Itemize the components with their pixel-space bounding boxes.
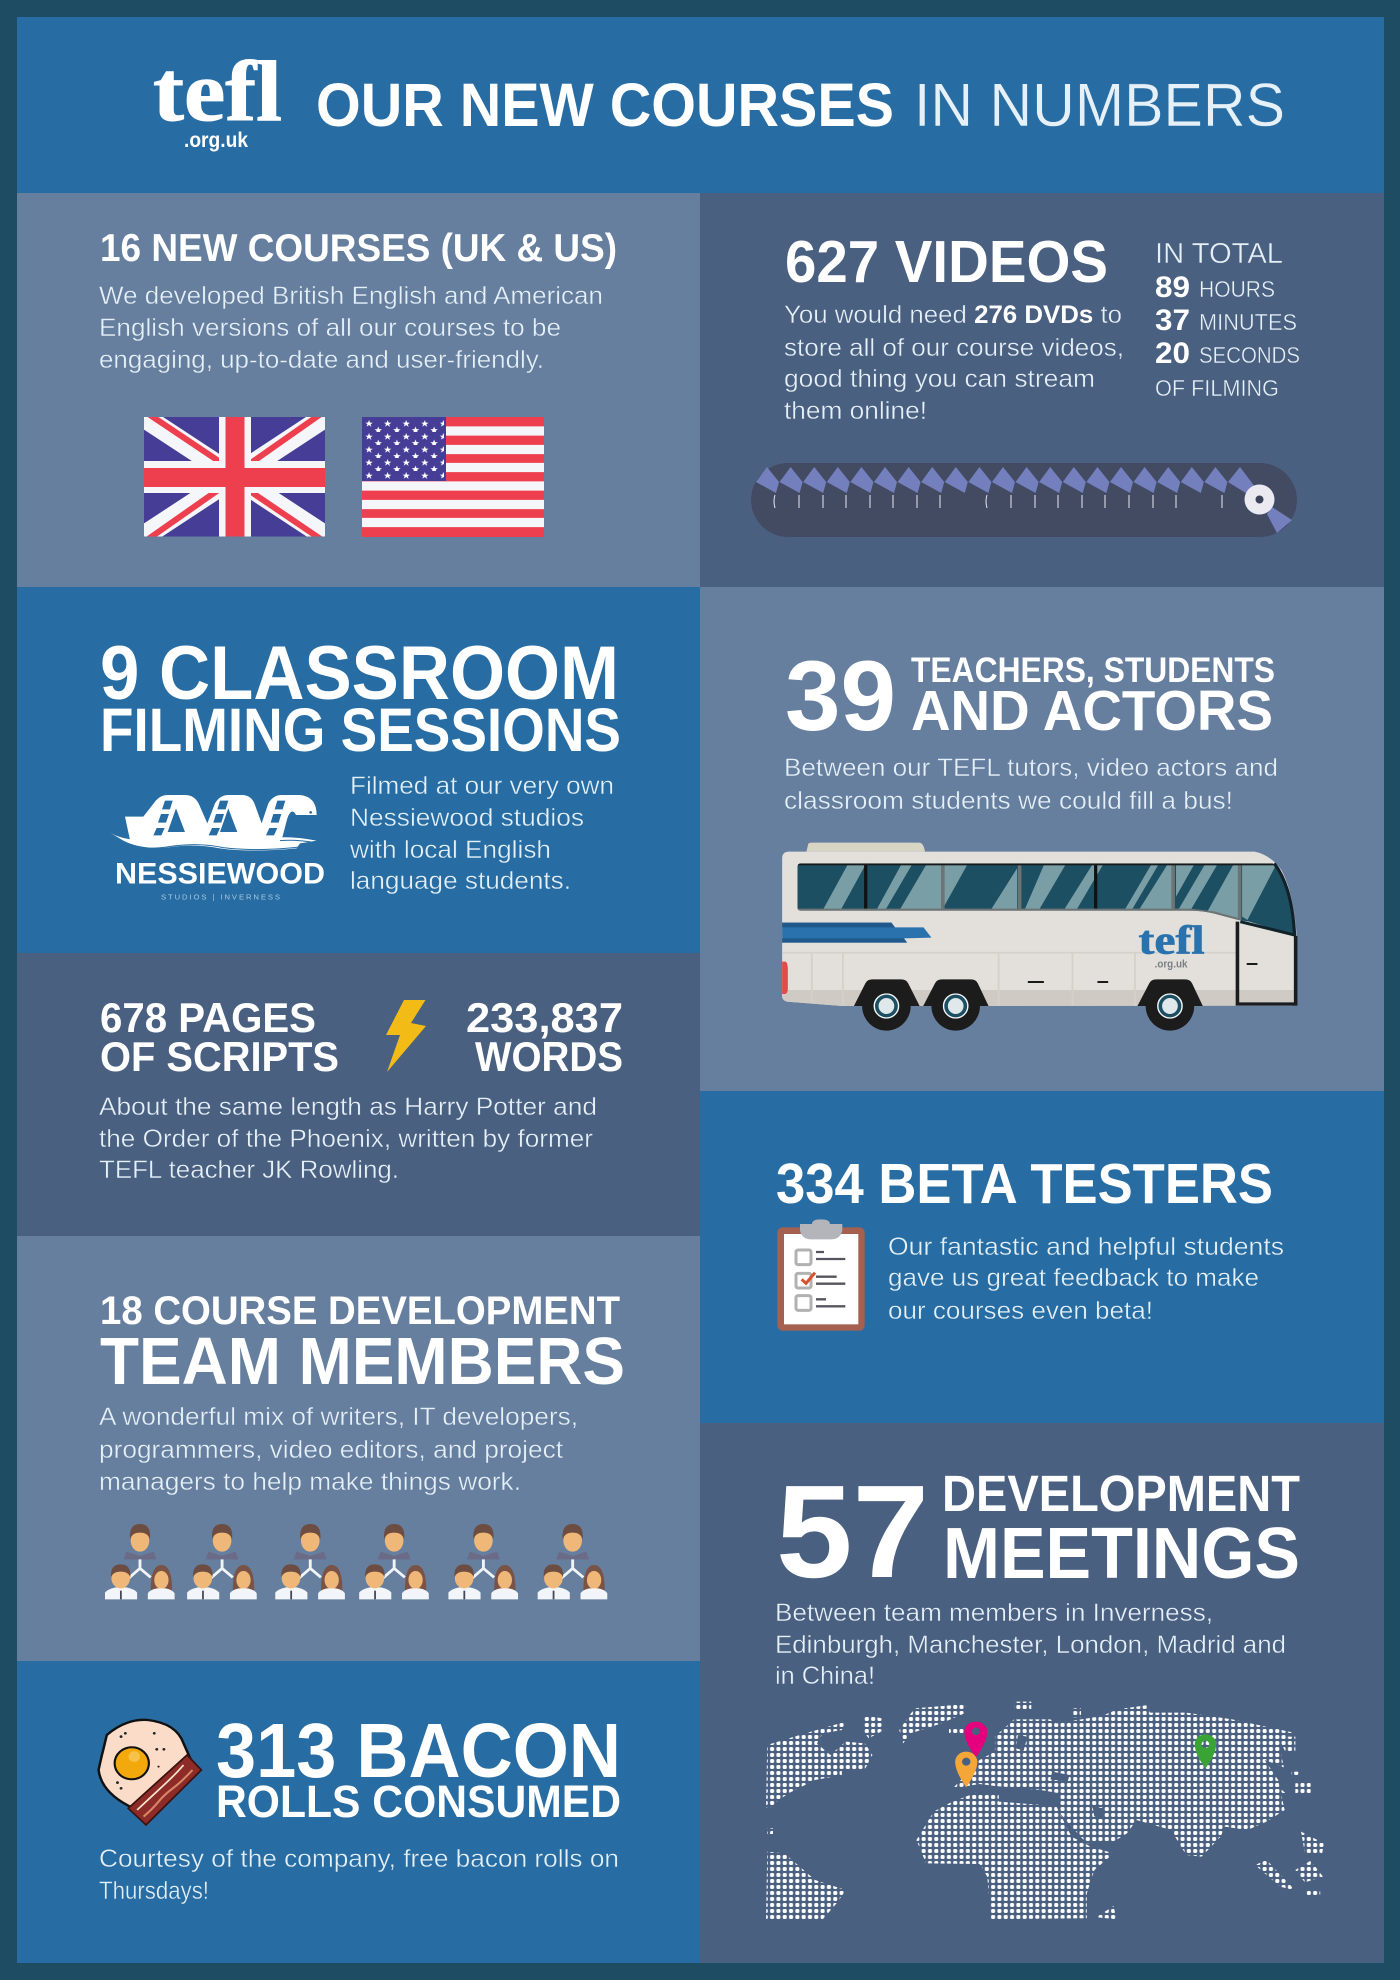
text block: Nessiewood studios: with local English <box>349 836 551 864</box>
text block: student feedback: Our fantastic and helpful students <box>888 1233 1284 1261</box>
heading: 16 new courses: 16 NEW COURSES (UK & US) <box>100 227 617 270</box>
text block: 276 DVDs: good thing you can stream <box>784 365 1095 393</box>
panel: 627 videos <box>700 193 1384 587</box>
icon: UK flag <box>144 411 325 542</box>
text block: meeting locations: Between team members in Inverness, <box>775 1599 1213 1627</box>
heading: 39 teachers, students and actors: 39 <box>785 640 896 751</box>
text block: free bacon rolls: Courtesy of the company, free bacon rolls on <box>99 1845 619 1873</box>
icon: clipboard checklist <box>777 1219 865 1331</box>
heading: 334 beta testers: 334 BETA TESTERS <box>776 1152 1273 1216</box>
text block: Nessiewood studios <box>349 772 614 895</box>
text block: 276 DVDs: store all of our course videos, <box>784 334 1124 362</box>
text block: total filming time: HOURS <box>1199 276 1275 302</box>
text block: fill a bus: classroom students we could fill a bus! <box>784 787 1233 815</box>
text block: total filming time: MINUTES <box>1199 309 1297 335</box>
heading: 9 classroom filming sessions <box>100 631 621 764</box>
logo: Nessiewood <box>110 795 325 901</box>
text block: Nessiewood studios: Nessiewood studios <box>350 804 584 832</box>
heading: 233,837 words: WORDS <box>475 1033 623 1080</box>
heading: 233,837 words: 233,837 <box>466 994 623 1041</box>
heading: 627 videos: 627 VIDEOS <box>785 229 1108 295</box>
text block: Nessiewood studios: language students. <box>350 867 571 895</box>
icon: pink pin <box>964 1722 987 1757</box>
icon: green pin <box>1195 1734 1216 1768</box>
text block: 276 DVDs: You would need 276 DVDs to <box>784 301 1122 329</box>
logo: Nessiewood: STUDIOS | INVERNESS <box>161 892 280 901</box>
logo: Nessiewood: NESSIEWOOD <box>115 857 325 890</box>
icon: tefl coach bus: tefl <box>1139 918 1205 963</box>
heading: 18 course development team members <box>100 1289 625 1399</box>
text block: Harry Potter comparison: TEFL teacher JK Rowling. <box>99 1156 399 1184</box>
heading: 39 teachers, students and actors: TEACHERS, STUDENTS <box>911 651 1275 690</box>
text block: British and American versions: engaging, up-to-date and user-friendly. <box>99 346 544 374</box>
text block: total filming time: OF FILMING <box>1155 375 1279 401</box>
heading: 313 bacon rolls consumed <box>216 1708 621 1827</box>
text block: total filming time: IN TOTAL <box>1155 238 1283 270</box>
text block: Harry Potter comparison: About the same length as Harry Potter and <box>99 1093 597 1121</box>
panel: 313 bacon rolls <box>17 1661 701 1963</box>
heading: 57 development meetings: 57 <box>776 1458 929 1605</box>
text block: total filming time: 37 <box>1155 304 1190 337</box>
text block: total filming time: SECONDS <box>1199 342 1300 368</box>
text block: British and American versions: English versions of all our courses to be <box>99 314 561 342</box>
panel: 39 teachers, students and actors <box>700 587 1384 1091</box>
panel: 16 new courses <box>17 193 701 587</box>
text block: team mix <box>99 1403 578 1496</box>
heading: 9 classroom filming sessions: FILMING SESSIONS <box>100 696 621 764</box>
heading: 57 development meetings: DEVELOPMENT <box>942 1465 1300 1522</box>
heading: 313 bacon rolls consumed: 313 BACON <box>216 1708 621 1794</box>
text block: student feedback: our courses even beta! <box>888 1297 1153 1325</box>
text block: fill a bus <box>784 754 1278 815</box>
panel: 678 pages of scripts <box>17 953 701 1236</box>
text block: British and American versions: We developed British English and American <box>99 282 603 310</box>
panel: 334 beta testers <box>700 1091 1384 1423</box>
heading: 18 course development team members: TEAM MEMBERS <box>100 1324 625 1399</box>
title: IN NUMBERS <box>914 71 1285 139</box>
text block: Harry Potter comparison <box>99 1093 597 1184</box>
logo: tefl.org.uk: tefl <box>153 43 282 139</box>
heading: 39 teachers, students and actors <box>785 640 1275 751</box>
text block: team mix: A wonderful mix of writers, IT developers, <box>99 1403 578 1431</box>
heading: 57 development meetings: MEETINGS <box>943 1514 1300 1594</box>
panel: 57 development meetings <box>700 1423 1384 1963</box>
heading: 18 course development team members: 18 COURSE DEVELOPMENT <box>100 1289 620 1333</box>
icon: tefl coach bus: .org.uk <box>1155 958 1188 970</box>
text block: Nessiewood studios: Filmed at our very own <box>350 772 614 800</box>
heading: 39 teachers, students and actors: AND ACTORS <box>911 679 1273 743</box>
text block: team mix: managers to help make things work. <box>99 1468 521 1496</box>
heading: 233,837 words <box>466 994 623 1080</box>
title: OUR NEW COURSES <box>316 71 894 139</box>
text block: Harry Potter comparison: the Order of the Phoenix, written by former <box>99 1125 593 1153</box>
text block: student feedback: gave us great feedback to make <box>888 1264 1259 1292</box>
text block: free bacon rolls <box>99 1845 619 1905</box>
logo: tefl.org.uk: .org.uk <box>184 129 248 152</box>
text block: British and American versions <box>99 282 603 374</box>
icon: row of DVDs <box>751 463 1297 537</box>
text block: meeting locations: Edinburgh, Manchester, London, Madrid and <box>775 1631 1286 1659</box>
heading: 313 bacon rolls consumed: ROLLS CONSUMED <box>216 1776 621 1827</box>
icon: tefl coach bus <box>782 843 1297 1031</box>
heading: 678 pages of scripts <box>100 994 339 1080</box>
heading: 57 development meetings <box>776 1458 1300 1605</box>
chart: dotted world map with pins <box>766 1702 1324 1919</box>
text block: meeting locations: in China! <box>775 1662 875 1690</box>
text block: total filming time: 20 <box>1155 337 1190 370</box>
icon: lightning bolt <box>386 1000 426 1072</box>
title <box>316 71 1285 139</box>
text block: total filming time <box>1155 238 1300 401</box>
header banner <box>17 17 1384 194</box>
heading: 678 pages of scripts: 678 PAGES <box>100 994 316 1041</box>
icon: orange pin <box>955 1752 977 1787</box>
text block: team mix: programmers, video editors, and project <box>99 1436 563 1464</box>
text block: total filming time: 89 <box>1155 271 1190 304</box>
text block: fill a bus: Between our TEFL tutors, video actors and <box>784 754 1278 782</box>
icon: egg and bacon <box>99 1720 201 1825</box>
text block: 276 DVDs <box>784 301 1124 425</box>
icon: six team groups <box>105 1524 607 1599</box>
text block: student feedback <box>888 1233 1284 1325</box>
text block: free bacon rolls: Thursdays! <box>99 1877 209 1905</box>
panel: 9 classroom filming sessions <box>17 587 701 954</box>
icon: US flag <box>362 417 544 537</box>
heading: 9 classroom filming sessions: 9 CLASSROOM <box>100 631 619 716</box>
text block: 276 DVDs: them online! <box>784 397 927 425</box>
text block: meeting locations <box>775 1599 1286 1690</box>
panel: 18 team members <box>17 1236 701 1661</box>
heading: 678 pages of scripts: OF SCRIPTS <box>100 1033 339 1080</box>
